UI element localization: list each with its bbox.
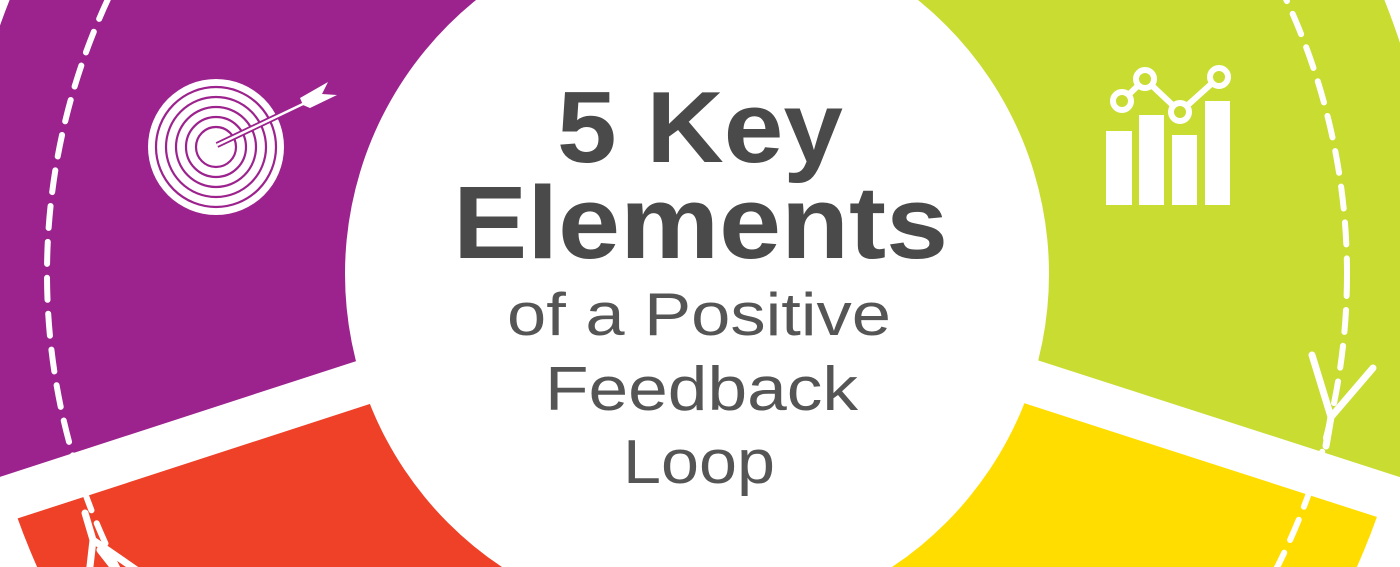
arrow: green segment <box>1312 355 1373 446</box>
title: Loop <box>623 428 775 497</box>
title <box>453 72 948 497</box>
segment: purple <box>0 0 476 477</box>
segment: red <box>18 404 502 567</box>
icon: target with arrow <box>148 79 337 215</box>
arrow: red segment <box>85 513 148 567</box>
segment: green <box>918 0 1400 478</box>
title: 5 Key <box>557 72 843 184</box>
title: Feedback <box>545 355 859 424</box>
icon: bar chart with trend line <box>1106 68 1230 205</box>
segment: yellow <box>892 403 1377 567</box>
title: Elements <box>453 165 948 280</box>
white center circle <box>345 0 1049 567</box>
title: of a Positive <box>507 281 891 348</box>
